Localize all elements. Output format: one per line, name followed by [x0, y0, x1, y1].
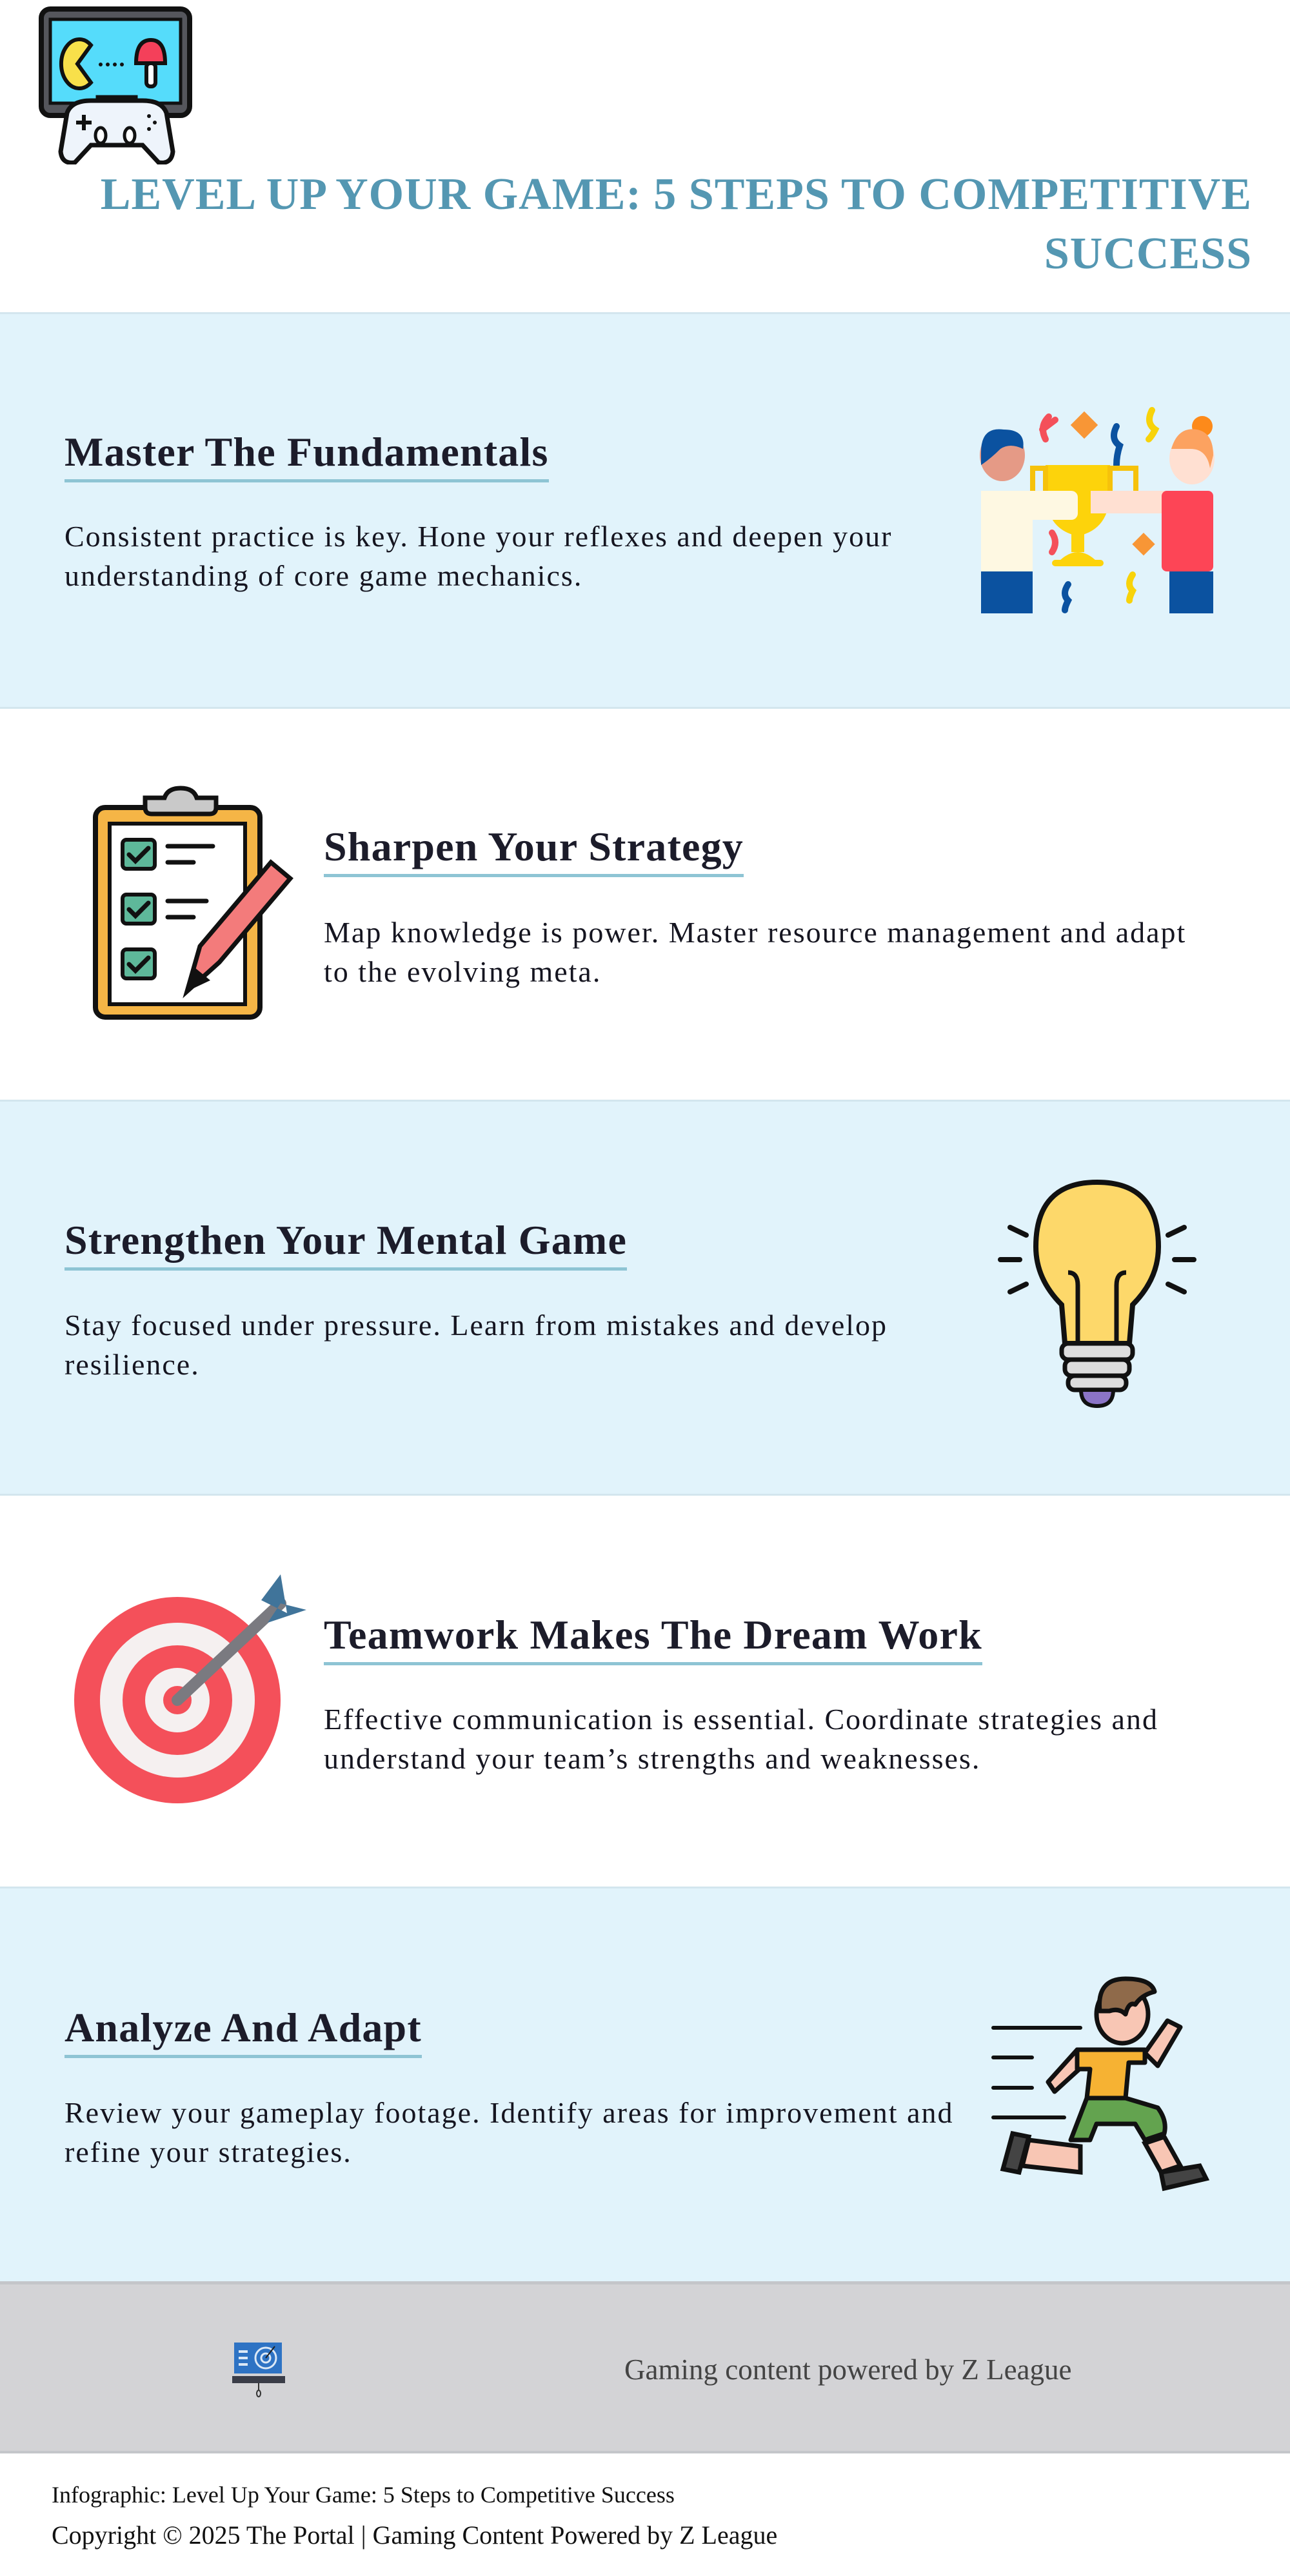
icon: light bulb: [998, 1180, 1196, 1408]
title: SUCCESS: [1044, 229, 1252, 279]
panel: master the fundamentals: [0, 312, 1290, 707]
panel: sharpen your strategy: [0, 707, 1290, 1102]
panel: teamwork: [0, 1494, 1290, 1888]
logo: game console icon: [39, 6, 192, 164]
icon: running man: [991, 1976, 1210, 2192]
text: fundamentals body: [64, 520, 892, 592]
text: strategy body: [324, 916, 1186, 988]
heading: teamwork makes the dream work: Teamwork Makes The Dream Work: [324, 1612, 982, 1658]
panel: analyze and adapt: [0, 1887, 1290, 2281]
heading: sharpen your strategy: Sharpen Your Strategy: [324, 824, 744, 869]
text: teamwork body: Effective communication is essential. Coordinate strategies and: [324, 1703, 1158, 1736]
text: analyze body: [64, 2096, 953, 2168]
icon: trophy celebration: [980, 407, 1215, 613]
text: mental game body: resilience.: [64, 1348, 200, 1381]
footer text: copyright: Copyright © 2025 The Portal | Gaming Content Powered by Z League: [52, 2521, 777, 2550]
text: analyze body: refine your strategies.: [64, 2135, 352, 2168]
footer text: infographic title: Infographic: Level Up Your Game: 5 Steps to Competitive Success: [52, 2482, 675, 2508]
text: fundamentals body: understanding of core game mechanics.: [64, 559, 582, 592]
text: strategy body: to the evolving meta.: [324, 955, 601, 988]
text: fundamentals body: Consistent practice is key. Hone your reflexes and deepen your: [64, 520, 892, 553]
text: teamwork body: [324, 1703, 1158, 1775]
text: teamwork body: understand your team’s strengths and weaknesses.: [324, 1742, 980, 1775]
heading: master the fundamentals: Master The Fundamentals: [64, 429, 549, 475]
heading: strengthen your mental game: Strengthen Your Mental Game: [64, 1217, 627, 1263]
heading: analyze and adapt: Analyze And Adapt: [64, 2005, 422, 2050]
text: analyze body: Review your gameplay footage. Identify areas for improvement and: [64, 2096, 953, 2129]
footer band: [0, 2281, 1290, 2453]
text: mental game body: Stay focused under pressure. Learn from mistakes and develop: [64, 1309, 888, 1342]
text: strategy body: Map knowledge is power. Master resource management and adapt: [324, 916, 1186, 949]
icon: target with arrow: [74, 1574, 306, 1803]
icon: clipboard checklist: [93, 786, 293, 1020]
panel: strengthen your mental game: [0, 1100, 1290, 1494]
text: gaming content powered by: Gaming content powered by Z League: [624, 2353, 1072, 2386]
text: mental game body: [64, 1309, 888, 1381]
icon: footer target board: [232, 2343, 285, 2397]
title: LEVEL UP YOUR GAME: 5 STEPS TO COMPETITIVE: [101, 170, 1252, 219]
title: [101, 170, 1252, 279]
